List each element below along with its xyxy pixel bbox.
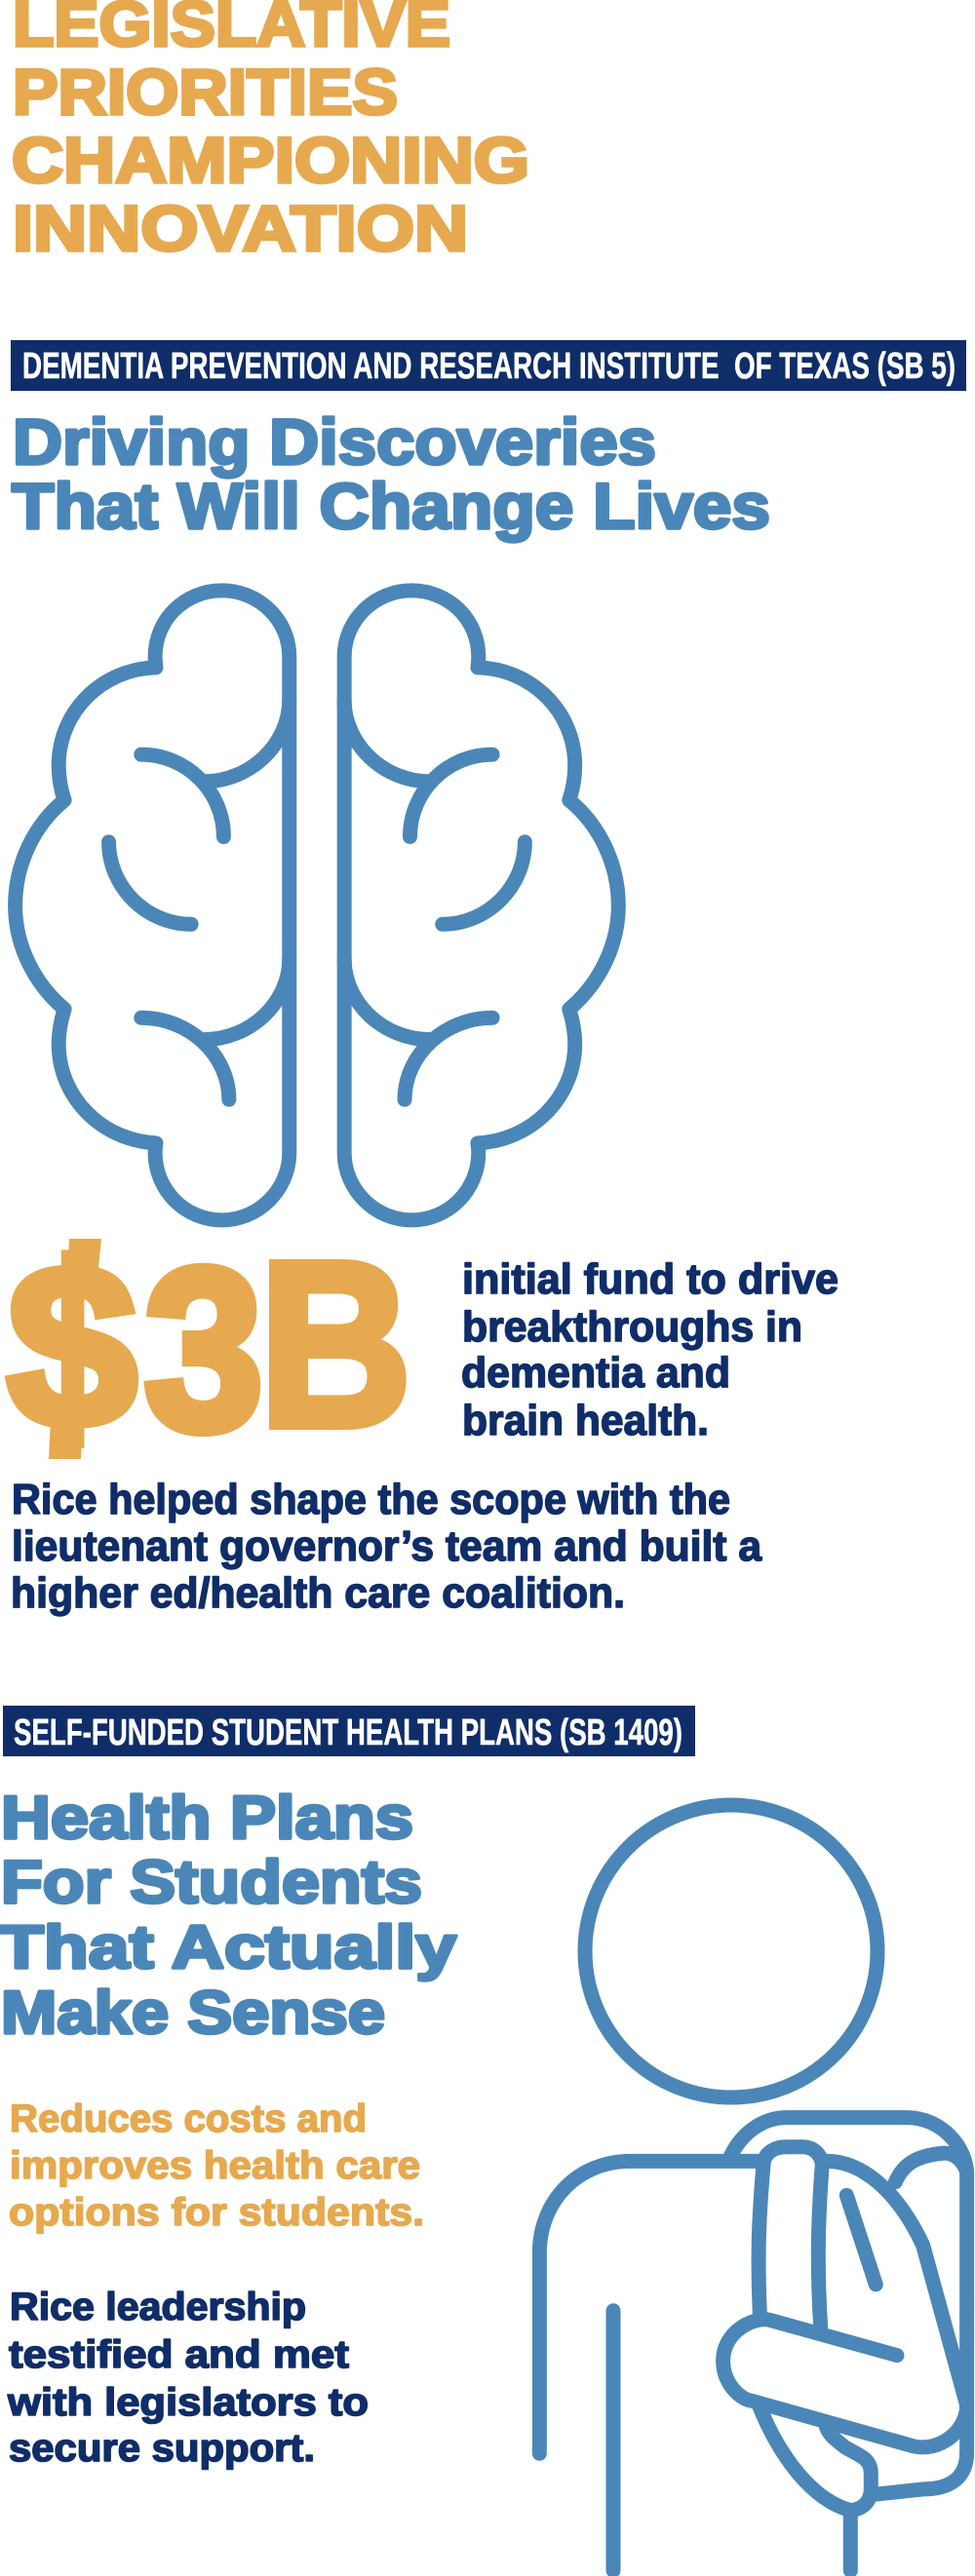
text: rice helped shape: lieutenant governor’s team and built a [12,1522,762,1570]
body and backpack [539,2118,967,2570]
head [585,1805,878,2097]
heading: health plans for students: Make Sense [1,1980,385,2047]
text: rice leadership: with legislators to [7,2381,369,2424]
heading: health plans for students: That Actually [0,1914,457,1981]
text: rice helped shape: higher ed/health care coalition. [11,1569,625,1617]
stat: $3B: $ [8,1218,136,1476]
text: reduces costs [9,2097,424,2234]
text: rice leadership [7,2286,369,2470]
right hemisphere [344,591,618,1220]
icon: student with backpack [539,1805,967,2570]
heading: driving discoveries: That Will Change Lives [12,470,770,542]
stat: $3B: B [259,1213,411,1475]
icon: brain [16,591,618,1220]
heading: health plans for students: For Students [1,1849,422,1916]
title: INNOVATION [13,192,468,264]
left hemisphere [16,591,290,1220]
text: rice leadership: testified and met [9,2333,349,2376]
banner: student health plans [3,1706,695,1756]
text: rice leadership: Rice leadership [10,2286,306,2328]
text: rice leadership: secure support. [9,2427,315,2470]
text: initial fund: dementia and [461,1349,730,1397]
banner: student health plans: SELF-FUNDED STUDENT HEALTH PLANS (SB 1409) [14,1712,682,1753]
text: rice helped shape [11,1476,762,1617]
heading: driving discoveries [12,405,770,542]
title: CHAMPIONING [12,124,529,196]
title [12,0,529,264]
text: reduces costs: Reduces costs and [10,2097,367,2140]
stat: $3B: 3 [144,1221,263,1479]
text: initial fund [461,1255,838,1444]
text: reduces costs: options for students. [9,2191,424,2234]
text: reduces costs: improves health care [10,2144,420,2187]
text: rice helped shape: Rice helped shape the scope with the [12,1476,730,1523]
text: initial fund: brain health. [462,1397,709,1444]
stat: $3B [8,1213,411,1479]
heading: driving discoveries: Driving Discoveries [13,405,656,478]
text: initial fund: breakthroughs in [462,1303,802,1351]
title: PRIORITIES [13,56,398,128]
heading: health plans for students [0,1785,457,2047]
text: initial fund: initial fund to drive [462,1255,838,1303]
heading: health plans for students: Health Plans [1,1785,413,1852]
